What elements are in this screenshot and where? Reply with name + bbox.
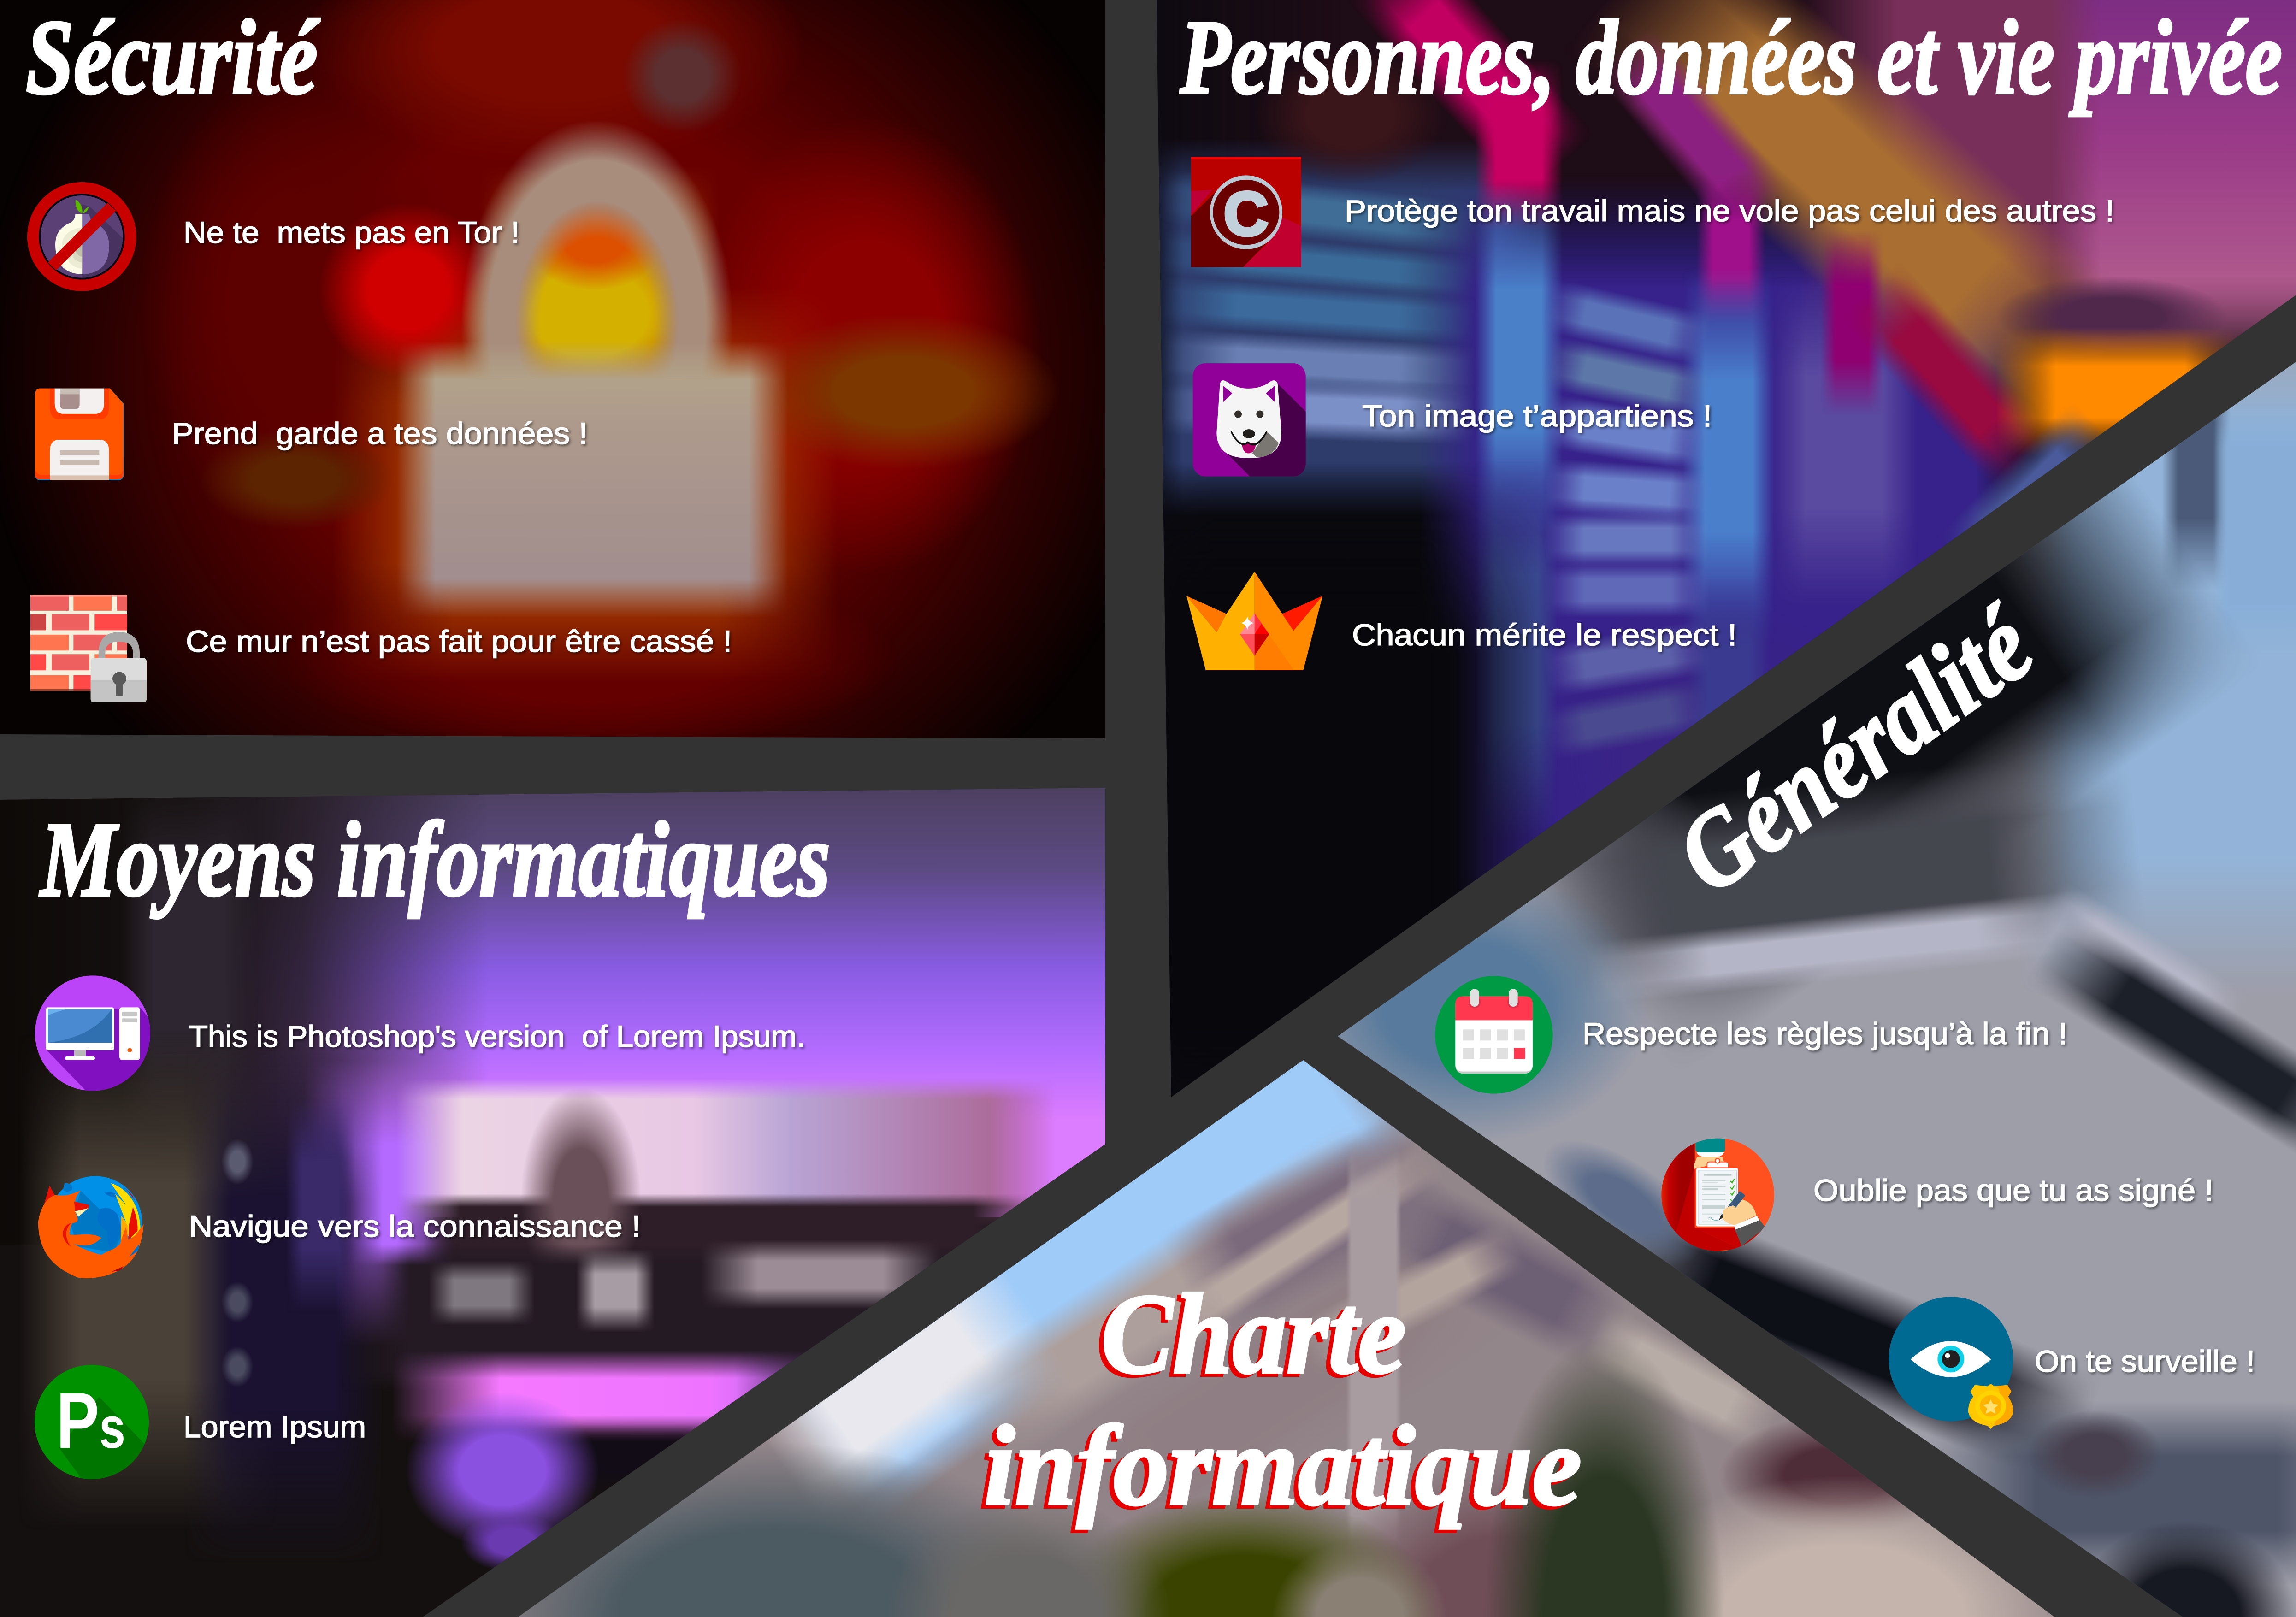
- panel background: blurred pen and paper photo: [1281, 295, 2296, 1617]
- icon: copyright: [1191, 157, 1301, 267]
- icon: Photoshop: [35, 1365, 157, 1493]
- heading: Charte informatique: Charte: [1101, 1270, 1406, 1397]
- icon: desktop computer: [35, 975, 152, 1094]
- panel background: blurred padlock photo: [0, 0, 1105, 738]
- icon: firewall with padlock: [30, 595, 147, 702]
- heading: Moyens informatiques: Moyens informatiques: [39, 800, 830, 919]
- text: données: Prend garde a tes données !: [172, 416, 588, 450]
- panel: Moyens informatiques: [0, 784, 1106, 1617]
- heading: Charte informatique: informatique: [984, 1402, 1582, 1529]
- panel background: blurred server room photo: [1106, 0, 2296, 1106]
- panel: Sécurité: [0, 0, 1105, 738]
- icon: eye with badge: [1889, 1297, 2013, 1429]
- text: surveille: On te surveille !: [2035, 1344, 2255, 1378]
- heading: Généralité: Généralité: [1656, 584, 2055, 916]
- icon: Photoshop: Ps: [56, 1376, 125, 1465]
- icon: signing clipboard: [1659, 1137, 1774, 1254]
- text: signé: Oublie pas que tu as signé !: [1813, 1173, 2213, 1207]
- text: Tor: Ne te mets pas en Tor !: [183, 215, 519, 249]
- icon: calendar: [1435, 976, 1553, 1094]
- text: travail: Protège ton travail mais ne vole pas celui des autres !: [1345, 194, 2114, 228]
- text: image: Ton image t’appartiens !: [1362, 399, 1712, 433]
- icon: dog face: [1193, 363, 1308, 478]
- text: respect: Chacun mérite le respect !: [1352, 618, 1737, 652]
- text: Photoshop: This is Photoshop's version of Lorem Ipsum.: [189, 1019, 805, 1053]
- text: mur: Ce mur n’est pas fait pour être cassé !: [186, 624, 732, 658]
- heading: Sécurité: Sécurité: [26, 0, 320, 117]
- icon: floppy disk: [35, 389, 124, 480]
- icon: crown: [1186, 572, 1322, 670]
- text: règles: Respecte les règles jusqu’à la fin !: [1582, 1016, 2067, 1050]
- text: Firefox: Navigue vers la connaissance !: [189, 1209, 641, 1243]
- panel background: blurred desk photo: [0, 784, 1106, 1617]
- icon: Tor crossed out: [27, 182, 136, 291]
- panel: Généralité: [1281, 295, 2296, 1617]
- panel background: blurred building photo: [461, 885, 2084, 1617]
- icon: Firefox: [38, 1176, 144, 1278]
- heading: Charte informatique: [984, 1270, 1582, 1529]
- panel: Charte informatique: [461, 885, 2084, 1617]
- text: Lorem Ipsum: Lorem Ipsum: [183, 1410, 366, 1444]
- icon: copyright: C: [1224, 180, 1268, 248]
- panel: Personnes, données et vie privée: [1106, 0, 2296, 1106]
